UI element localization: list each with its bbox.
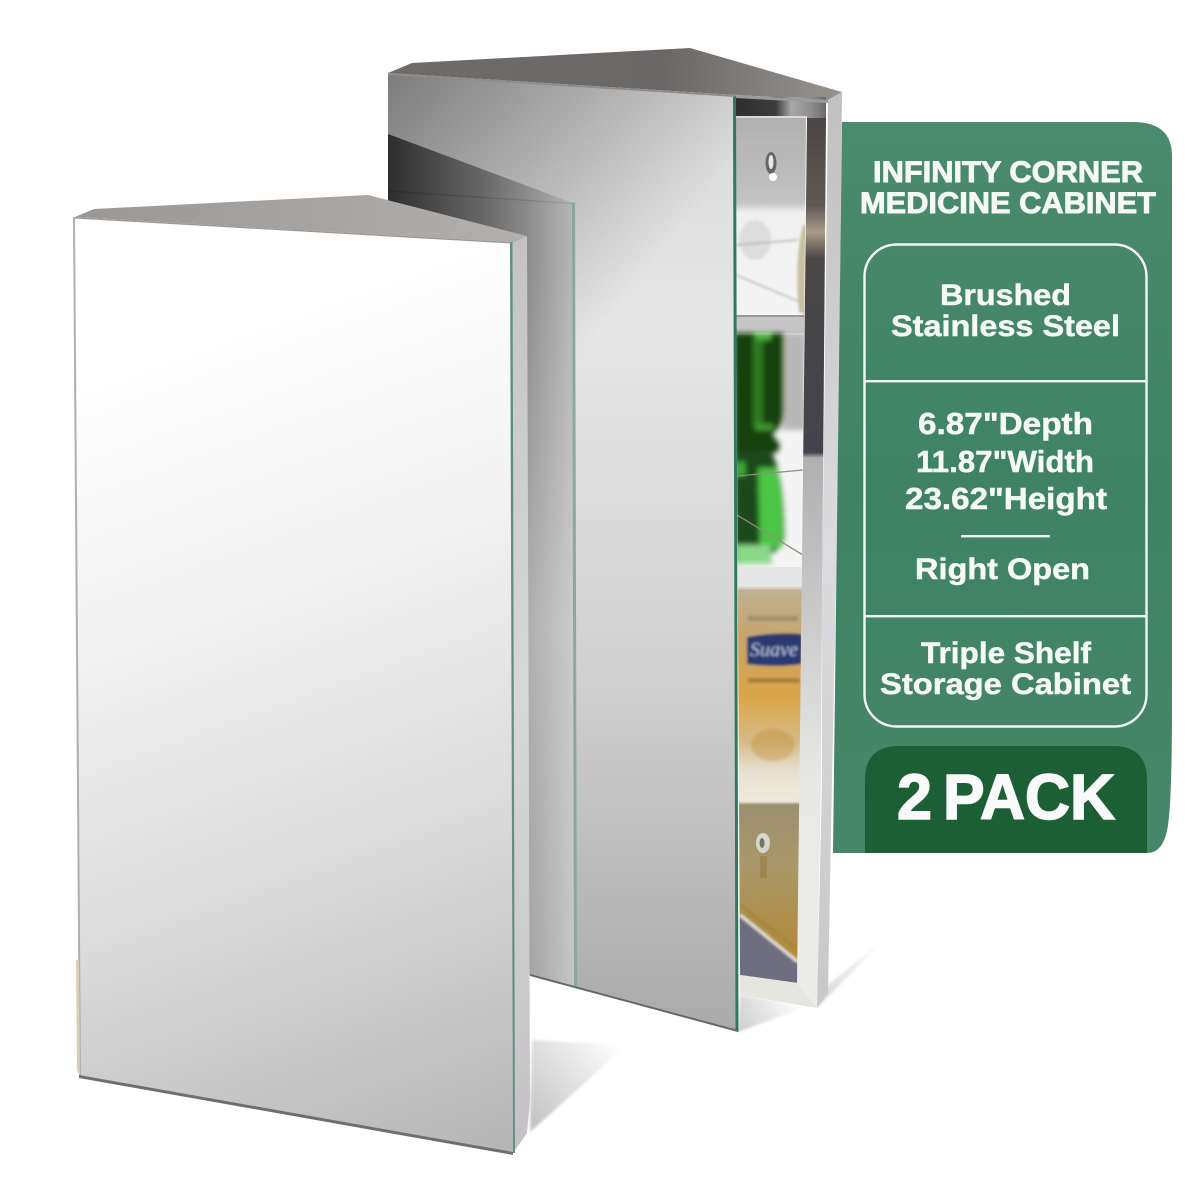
2 pack badge: 2: [897, 761, 932, 833]
green bottle: [734, 333, 807, 569]
title: MEDICINE CABINET: [860, 187, 1156, 220]
dimensions text: 11.87"Width: [916, 444, 1094, 479]
rear cabinet interior: [734, 97, 827, 988]
spec box: [864, 244, 1146, 726]
hook: [766, 152, 777, 181]
dimensions text: 23.62"Height: [905, 481, 1107, 516]
door direction text: Right Open: [915, 553, 1090, 586]
dimensions text: 6.87"Depth: [918, 406, 1093, 441]
lotion bottle: [735, 588, 807, 803]
material text: Brushed: [940, 279, 1071, 312]
open rear corner cabinet: [388, 48, 842, 1032]
interior side wall: [797, 118, 826, 1008]
front top face: [75, 195, 527, 243]
door mirror: [388, 73, 738, 1032]
shelf two: [738, 567, 802, 588]
reflection on door: [388, 73, 738, 1032]
lower shelf contents: [739, 801, 800, 983]
storage text: Triple Shelf: [921, 637, 1092, 670]
material text: Stainless Steel: [891, 310, 1120, 343]
green spec panel: [833, 122, 1172, 853]
outer frame: [817, 92, 842, 1008]
storage text: [880, 637, 1131, 701]
title: INFINITY CORNER: [873, 156, 1143, 189]
panel background: [833, 122, 1172, 853]
front closed cabinet: [73, 195, 530, 1155]
2 pack badge: [865, 746, 1147, 853]
storage text: Storage Cabinet: [880, 668, 1131, 701]
rear cabinet top face: [388, 48, 842, 100]
mirror edges: [73, 217, 515, 1155]
lotion bottle: Suave: [750, 639, 798, 661]
shelf one: [735, 315, 807, 333]
2 pack badge: PACK: [943, 761, 1115, 833]
lower hook: [756, 833, 770, 878]
front mirror: [74, 217, 513, 1153]
material text: [891, 279, 1120, 343]
front side edge: [512, 236, 530, 1153]
interior bottom lip: [740, 975, 817, 1008]
upper shelf contents: [736, 220, 808, 315]
suave label: [747, 633, 802, 666]
floor shadows: [530, 937, 887, 1132]
title: [860, 156, 1156, 220]
dimensions text: [905, 406, 1107, 516]
